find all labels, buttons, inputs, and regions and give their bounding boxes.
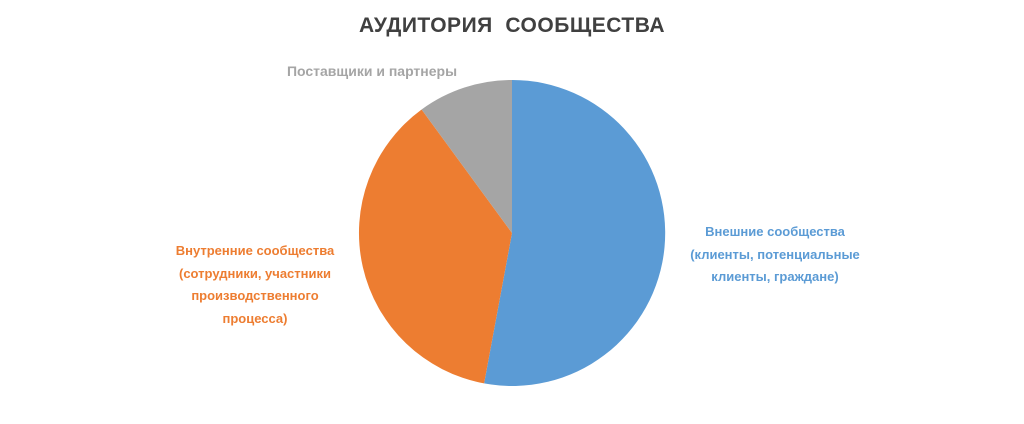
label: internal communities xyxy=(176,243,334,326)
label: external communities: клиенты, граждане) xyxy=(711,269,839,284)
slice: internal communities xyxy=(359,110,512,383)
slice: external communities xyxy=(484,80,665,386)
slice: suppliers and partners xyxy=(422,80,512,233)
label: internal communities: Внутренние сообщества xyxy=(176,243,334,258)
label: external communities xyxy=(690,224,860,284)
label: internal communities: производственного xyxy=(191,288,319,303)
label: external communities: (клиенты, потенциальные xyxy=(690,246,860,262)
label: internal communities: процесса) xyxy=(223,310,287,326)
label: suppliers: Поставщики и партнеры xyxy=(287,63,457,79)
label: internal communities: (сотрудники, участники xyxy=(179,266,331,280)
label: external communities: Внешние сообщества xyxy=(705,224,845,239)
title: АУДИТОРИЯ СООБЩЕСТВА xyxy=(359,14,665,37)
